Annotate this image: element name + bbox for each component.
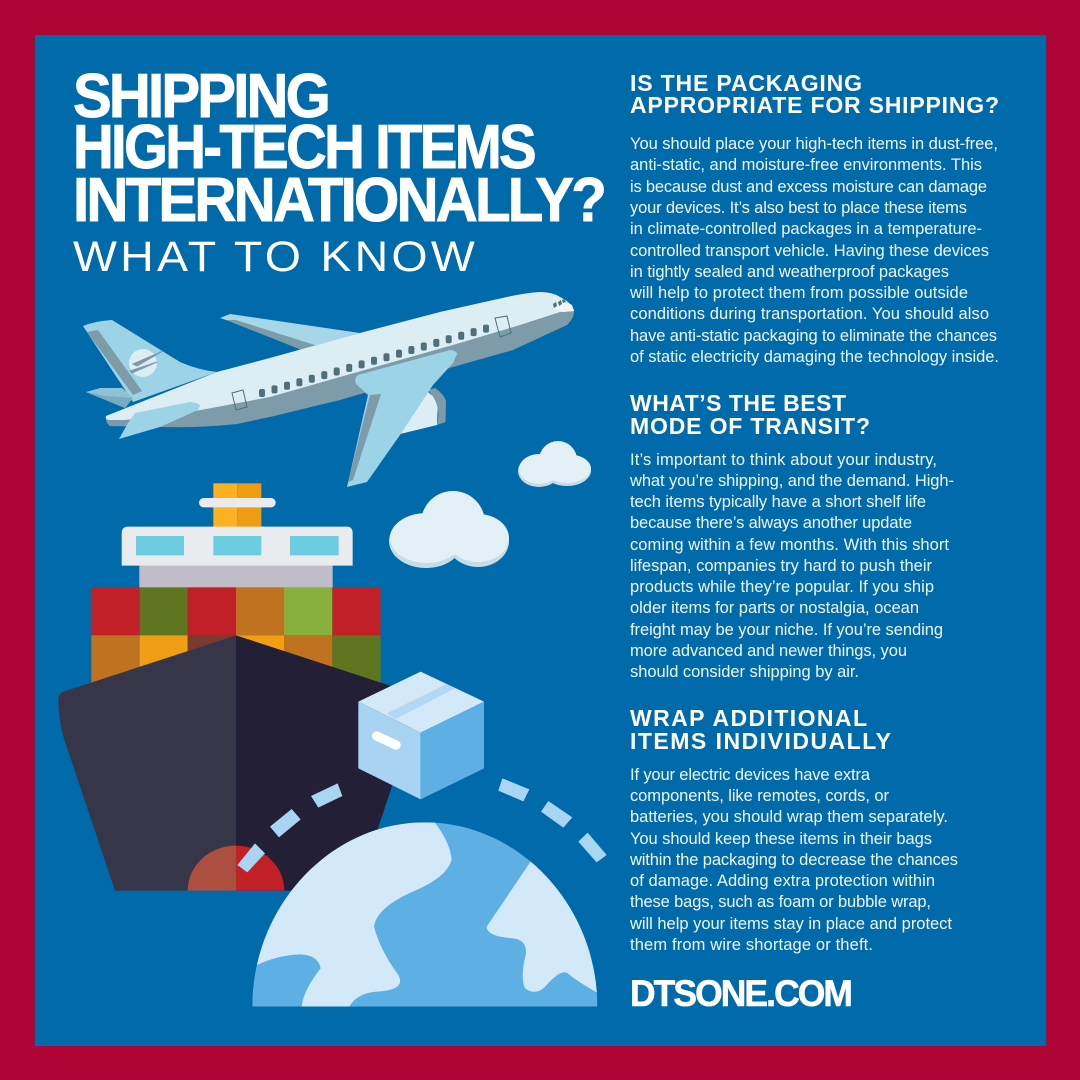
text: transit body: because there’s always another update [630, 514, 912, 532]
title: HIGH-TECH ITEMS [73, 113, 535, 182]
icon: container ship [58, 483, 414, 891]
text: packaging body: your devices. It’s also best to place these items [630, 199, 967, 217]
title: INTERNATIONALLY? [73, 166, 604, 235]
heading: packaging: APPROPRIATE FOR SHIPPING? [630, 92, 999, 118]
heading: transit: WHAT’S THE BEST [630, 390, 846, 416]
icon: parcel, route and globe [230, 672, 630, 1007]
section: packaging [629, 70, 999, 366]
text: transit body: what you’re shipping, and the demand. High- [629, 472, 954, 490]
text: packaging body: You should place your high-tech items in dust-free, [630, 135, 998, 153]
icon: small cloud [518, 441, 591, 487]
text: transit body: lifespan, companies try hard to push their [630, 557, 932, 575]
section: transit [629, 390, 954, 681]
ship funnel [199, 483, 276, 527]
text: transit body: products while they’re popular. If you ship [630, 578, 934, 596]
text: wrapping body: will help your items stay in place and protect [629, 915, 952, 933]
text: packaging body [629, 135, 999, 366]
text: packaging body: have anti-static packaging to eliminate the chances [630, 327, 997, 345]
text: transit body: It’s important to think about your industry, [630, 451, 937, 469]
text: wrapping body: of damage. Adding extra protection within [630, 872, 935, 890]
text: transit body [629, 451, 954, 681]
heading: packaging [630, 70, 999, 118]
text: transit body: should consider shipping by air. [630, 663, 859, 681]
icon: airplane [83, 292, 574, 487]
text: wrapping body: them from wire shortage or theft. [630, 936, 873, 954]
dashed route [237, 778, 607, 872]
text: transit body: more advanced and newer things, you [630, 642, 907, 660]
ship bridge [122, 527, 353, 588]
text: transit body: coming within a few months. With this short [630, 536, 949, 554]
text: packaging body: is because dust and excess moisture can damage [630, 178, 987, 196]
text: packaging body: in climate-controlled packages in a temperature- [630, 220, 982, 238]
text: wrapping body: You should keep these items in their bags [630, 830, 932, 848]
icon: large cloud [389, 491, 509, 568]
text: wrapping body: If your electric devices have extra [630, 766, 871, 784]
text: packaging body: in tightly sealed and weatherproof packages [630, 263, 949, 281]
text: transit body: older items for parts or nostalgia, ocean [630, 599, 919, 617]
text: wrapping body: components, like remotes, cords, or [630, 787, 890, 805]
text: transit body: tech items typically have a short shelf life [630, 493, 926, 511]
heading: wrapping: ITEMS INDIVIDUALLY [630, 728, 891, 754]
text: wrapping body: these bags, such as foam or bubble wrap, [630, 893, 931, 911]
airplane windows [259, 325, 489, 397]
heading: wrapping [630, 705, 891, 754]
title: SHIPPING [73, 62, 328, 131]
text: packaging body: conditions during transportation. You should also [630, 305, 989, 323]
text: packaging body: of static electricity damaging the technology inside. [630, 348, 999, 366]
icon: globe [252, 822, 598, 1006]
text: packaging body: controlled transport vehicle. Having these devices [630, 242, 989, 260]
text: wrapping body [629, 766, 958, 954]
containers [91, 587, 381, 685]
heading: packaging: IS THE PACKAGING [630, 70, 862, 96]
icon: parcel box [358, 672, 484, 799]
title: WHAT TO KNOW [73, 233, 478, 281]
heading: transit: MODE OF TRANSIT? [630, 413, 870, 439]
text: wrapping body: batteries, you should wrap them separately. [630, 808, 948, 826]
text: transit body: freight may be your niche. If you’re sending [630, 621, 943, 639]
section: wrapping [629, 705, 958, 954]
text: wrapping body: within the packaging to decrease the chances [629, 851, 958, 869]
heading: transit [630, 390, 870, 439]
ship hull [58, 635, 414, 891]
text: packaging body: anti-static, and moisture-free environments. This [630, 156, 982, 174]
footer website: DTSONE.COM [630, 973, 851, 1014]
text: packaging body: will help to protect them from possible outside [629, 284, 968, 302]
heading: wrapping: WRAP ADDITIONAL [630, 705, 867, 731]
title [73, 62, 604, 281]
